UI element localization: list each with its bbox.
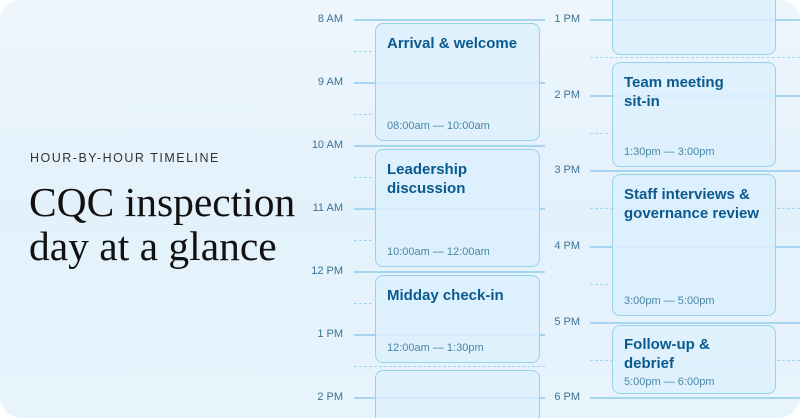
card: team meeting: 1:30pm — 3:00pm <box>624 146 714 158</box>
right column timeline: 3 PM <box>554 164 580 176</box>
card: leadership: Leadership <box>387 161 467 178</box>
card: staff interviews: governance review <box>624 205 759 222</box>
card: arrival: 08:00am — 10:00am <box>387 120 490 132</box>
eyebrow: HOUR-BY-HOUR TIMELINE <box>30 151 220 165</box>
card: team meeting: sit-in <box>624 93 660 110</box>
left column timeline: 11 AM <box>313 202 343 214</box>
left column timeline: 10 AM <box>312 139 343 151</box>
card: leadership <box>375 149 540 267</box>
card: team meeting: Team meeting <box>624 74 724 91</box>
title: CQC inspection <box>29 179 295 225</box>
card: midday: 12:00am — 1:30pm <box>387 342 484 354</box>
card: arrival <box>375 23 540 141</box>
left column timeline: 1 PM <box>317 328 343 340</box>
card: leadership: 10:00am — 12:00am <box>387 246 490 258</box>
card: midday: Midday check-in <box>387 287 504 304</box>
left column timeline: 8 AM <box>318 13 343 25</box>
right column timeline: 2 PM <box>554 89 580 101</box>
title <box>29 179 295 269</box>
left column timeline: 9 AM <box>318 76 343 88</box>
card: follow-up: Follow-up & <box>624 336 710 353</box>
card: staff interviews <box>612 174 776 316</box>
right column timeline: 6 PM <box>554 391 580 403</box>
card: midday <box>375 275 540 363</box>
card: follow-up <box>612 325 776 394</box>
card: follow-up: 5:00pm — 6:00pm <box>624 376 714 388</box>
card: leadership: discussion <box>387 180 465 197</box>
left column timeline: 2 PM <box>317 391 343 403</box>
title: day at a glance <box>29 223 277 269</box>
card: team meeting <box>612 62 776 167</box>
left column timeline: 12 PM <box>311 265 343 277</box>
card: staff interviews: Staff interviews & <box>624 186 750 203</box>
right column timeline: 5 PM <box>554 316 580 328</box>
card: staff interviews: 3:00pm — 5:00pm <box>624 295 714 307</box>
card: arrival: Arrival & welcome <box>387 35 517 52</box>
card: partial bottom <box>375 370 540 418</box>
right column timeline: 1 PM <box>554 13 580 25</box>
card: top partial <box>612 0 776 55</box>
right column timeline: 4 PM <box>554 240 580 252</box>
card: follow-up: debrief <box>624 355 674 372</box>
